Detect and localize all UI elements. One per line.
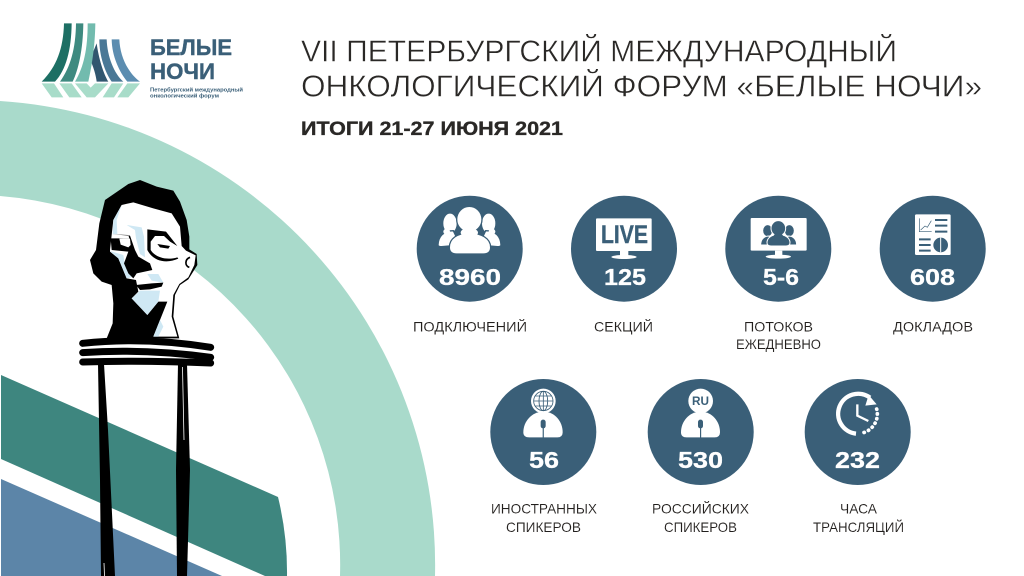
title line 1: VII ПЕТЕРБУРГСКИЙ МЕЖДУНАРОДНЫЙ xyxy=(301,32,897,68)
value: 608 xyxy=(910,264,955,290)
label: ПОДКЛЮЧЕНИЙ xyxy=(413,318,527,334)
icon: monitor with people xyxy=(751,218,807,259)
label xyxy=(652,500,750,535)
label: РОССИЙСКИХ xyxy=(652,500,750,516)
label: СЕКЦИЙ xyxy=(594,318,653,334)
label: ПОТОКОВ xyxy=(744,318,813,334)
icon: speaker RU xyxy=(681,389,720,438)
icon: three people xyxy=(438,206,501,254)
logo subtitle line 1: Петербургский международный xyxy=(150,86,244,94)
circle xyxy=(648,379,754,485)
circle xyxy=(417,196,523,302)
stat: секций xyxy=(571,196,677,334)
label: ТРАНСЛЯЦИЙ xyxy=(813,518,904,535)
label: ЕЖЕДНЕВНО xyxy=(736,336,821,352)
stat: российских спикеров xyxy=(648,379,754,535)
value: 232 xyxy=(835,447,880,473)
illustration: monument head xyxy=(90,180,197,338)
logo text: НОЧИ: НОЧИ xyxy=(150,59,215,84)
label xyxy=(813,500,904,535)
icon: speaker with globe xyxy=(523,389,563,438)
value: 5-6 xyxy=(763,264,799,290)
icon: live monitor xyxy=(596,218,652,259)
label: ДОКЛАДОВ xyxy=(893,318,973,334)
stat: потоков ежедневно xyxy=(725,196,831,352)
circle xyxy=(725,196,831,302)
title line 2: ОНКОЛОГИЧЕСКИЙ ФОРУМ «БЕЛЫЕ НОЧИ» xyxy=(301,68,982,104)
illustration: monument legs xyxy=(98,364,190,576)
circle xyxy=(571,196,677,302)
logo mark: stripes and chevrons xyxy=(42,23,140,97)
background: blue diagonal band xyxy=(1,479,222,576)
value: 530 xyxy=(678,447,723,473)
label: ЧАСА xyxy=(840,500,878,516)
circle xyxy=(805,379,911,485)
value: 56 xyxy=(529,447,559,473)
icon text: LIVE: LIVE xyxy=(601,221,648,249)
circle xyxy=(490,379,596,485)
subtitle: dates: ИТОГИ 21-27 ИЮНЯ 2021 xyxy=(301,119,563,140)
illustration: monument collar strokes xyxy=(83,341,211,363)
icon: report document xyxy=(915,214,951,255)
logo: Белые ночи xyxy=(42,23,244,100)
icon text: RU: RU xyxy=(692,396,709,408)
label xyxy=(736,318,821,352)
stat: иностранных спикеров xyxy=(490,379,598,535)
label: СПИКЕРОВ xyxy=(506,519,581,535)
background: green diagonal band xyxy=(1,375,287,576)
logo text: БЕЛЫЕ: БЕЛЫЕ xyxy=(150,35,232,60)
stat: докладов xyxy=(880,196,986,334)
icon: clock with arrow xyxy=(838,394,877,434)
background: mint arc xyxy=(0,101,435,576)
title xyxy=(301,32,982,104)
value: 125 xyxy=(604,264,646,290)
label: СПИКЕРОВ xyxy=(664,519,737,535)
stat: подключений xyxy=(413,196,527,334)
value: 8960 xyxy=(439,264,501,290)
label xyxy=(491,500,598,535)
circle xyxy=(880,196,986,302)
stat: часа трансляций xyxy=(805,379,911,535)
label: ИНОСТРАННЫХ xyxy=(491,500,598,516)
logo subtitle line 2: онкологический форум xyxy=(150,92,219,100)
